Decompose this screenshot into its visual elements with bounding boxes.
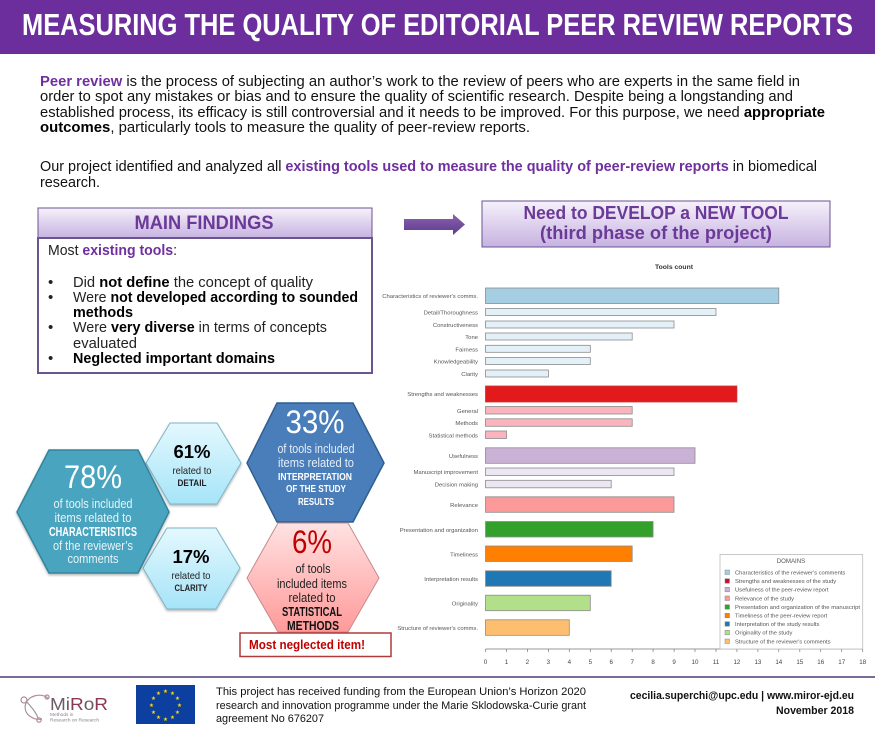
main findings list: Did not define the concept of quality — [73, 274, 313, 291]
category labels: Statistical methods — [429, 434, 478, 440]
category labels: Presentation and organization — [400, 528, 478, 534]
logo: EU flag: ★ — [149, 702, 154, 709]
bar chart: tools count — [382, 264, 867, 666]
x axis: 2 — [526, 659, 530, 666]
hexagon: 78% characteristics: of tools included — [54, 497, 133, 511]
main findings list: • — [48, 350, 53, 367]
category labels: Interpretation results — [424, 577, 478, 583]
x axis: 14 — [775, 659, 783, 666]
hexagon: 61% detail: related to — [172, 465, 212, 477]
main findings list — [38, 238, 372, 373]
contact details — [630, 690, 854, 717]
chart title: Tools count — [655, 264, 694, 271]
category labels: Relevance — [450, 503, 479, 509]
x axis: 5 — [589, 659, 593, 666]
category labels: Timeliness — [450, 552, 478, 558]
legend: domains: Structure of the reviewer's comments — [735, 639, 831, 645]
hexagon: 6% statistical methods: included items — [277, 577, 347, 591]
logo: EU flag: ★ — [175, 695, 180, 702]
main findings list: Were not developed according to sounded — [73, 289, 358, 306]
category labels: Knowledgeability — [434, 360, 478, 366]
logo: EU flag: ★ — [151, 695, 156, 702]
hexagon: 78% characteristics: CHARACTERISTICS — [49, 525, 137, 539]
hexagon: 78% characteristics: comments — [68, 552, 118, 566]
logo: EU flag: ★ — [163, 716, 168, 723]
hexagon: 17% clarity: 17% — [172, 547, 210, 567]
x axis: 8 — [651, 659, 655, 666]
arrow to new tool — [404, 214, 465, 235]
main findings list: methods — [73, 304, 133, 321]
hexagon: 78% characteristics: items related to — [54, 511, 132, 525]
callout: need to develop a new tool: (third phase of the project) — [540, 222, 772, 243]
logo: EU flag: ★ — [175, 709, 180, 716]
legend: domains: Originality of the study — [735, 631, 792, 637]
logo: EU flag: ★ — [163, 688, 168, 695]
hexagon: 78% characteristics: of the reviewer’s — [53, 539, 133, 553]
logo: EU flag: ★ — [151, 709, 156, 716]
main findings list: • — [48, 274, 53, 291]
legend: domains: Presentation and organization of the manuscript — [735, 605, 860, 611]
category labels: Decision making — [435, 482, 478, 488]
hexagon: 33% interpretation: items related to — [278, 456, 354, 470]
main findings list: Most existing tools: — [48, 242, 177, 259]
funding statement — [216, 686, 586, 725]
x axis: 10 — [692, 659, 699, 666]
category labels: Clarity — [461, 372, 478, 378]
category labels: Strengths and weaknesses — [407, 392, 478, 398]
x axis: 4 — [568, 659, 572, 666]
x axis: 15 — [796, 659, 804, 666]
x axis: 12 — [733, 659, 741, 666]
logo: EU flag: ★ — [170, 690, 175, 697]
main findings list: Neglected important domains — [73, 350, 275, 367]
main findings list: evaluated — [73, 335, 137, 352]
hexagon: 6% statistical methods: METHODS — [287, 619, 339, 633]
x axis: 0 — [484, 659, 488, 666]
legend: domains: Usefulness of the peer-review report — [735, 588, 829, 594]
legend: domains: Interpretation of the study results — [735, 622, 820, 628]
category labels: Originality — [452, 602, 478, 608]
intro text: peer review definition: Peer review is the process of subjecting an author’s work to the review of peers who are experts in the same field in — [40, 74, 800, 90]
category labels: Detail/Thoroughness — [424, 310, 478, 316]
intro text: peer review definition: order to spot any mistakes or bias and to ensure the quality of scientific research. Despite being a longstanding and — [40, 89, 793, 105]
contact details: cecilia.superchi@upc.edu | www.miror-ejd.eu — [630, 690, 854, 702]
hexagon: 33% interpretation: OF THE STUDY — [286, 483, 346, 495]
hexagon: 61% detail — [146, 423, 241, 504]
legend: domains: Characteristics of the reviewer's comments — [735, 570, 845, 576]
contact details: November 2018 — [776, 705, 854, 717]
x axis: 17 — [838, 659, 846, 666]
x axis: 16 — [817, 659, 825, 666]
category labels: Constructiveness — [433, 323, 478, 329]
x axis: 7 — [630, 659, 634, 666]
legend: domains: DOMAINS — [777, 558, 805, 565]
intro text: project aim: Our project identified and analyzed all existing tools used to measure the quality of peer-review reports in biomedical — [40, 159, 817, 175]
x axis: 13 — [754, 659, 762, 666]
hexagon: 17% clarity: related to — [172, 570, 211, 582]
hexagon: 6% statistical methods: STATISTICAL — [282, 605, 342, 619]
category labels: Manuscript improvement — [414, 470, 478, 476]
x axis: 6 — [609, 659, 613, 666]
logo: MiRoR: Methods in — [50, 712, 74, 718]
logo: EU flag: ★ — [170, 714, 175, 721]
x axis: 18 — [859, 659, 867, 666]
x axis: 11 — [713, 659, 720, 666]
category labels — [382, 294, 479, 632]
hexagon: 61% detail: DETAIL — [178, 478, 207, 489]
hexagon: 33% interpretation: 33% — [286, 404, 344, 440]
main findings list: • — [48, 289, 53, 306]
hexagon: 78% characteristics: 78% — [64, 459, 122, 495]
hexagon: 33% interpretation: INTERPRETATION — [278, 471, 352, 483]
funding statement: This project has received funding from the European Union’s Horizon 2020 — [216, 686, 586, 698]
hexagon: 6% statistical methods: of tools — [296, 562, 330, 576]
x axis — [484, 649, 867, 666]
hexagon: 33% interpretation: of tools included — [278, 442, 355, 456]
x axis: 9 — [672, 659, 676, 666]
logo: EU flag: ★ — [156, 690, 161, 697]
hexagon: 17% clarity — [143, 528, 240, 609]
panel: main findings — [38, 208, 372, 373]
bars — [486, 288, 779, 635]
logo: MiRoR — [21, 694, 108, 724]
logo: MiRoR: Research on Research — [50, 718, 99, 724]
hexagon: 78% characteristics — [17, 450, 169, 573]
callout: most neglected item: Most neglected item! — [249, 638, 365, 652]
callout: need to develop a new tool — [482, 201, 830, 247]
category labels: Characteristics of reviewer's comms. — [382, 294, 478, 300]
main findings list: Were very diverse in terms of concepts — [73, 319, 327, 336]
title banner — [0, 0, 875, 54]
logo: MiRoR: MiRoR — [50, 694, 108, 714]
footer divider — [0, 676, 875, 678]
category labels: Usefulness — [449, 454, 478, 460]
logo: EU flag — [136, 685, 195, 724]
hexagon: 6% statistical methods: 6% — [292, 524, 332, 560]
hexagon: 6% statistical methods: related to — [288, 591, 336, 605]
hexagon: 61% detail: 61% — [174, 442, 210, 462]
logo: EU flag: ★ — [156, 714, 161, 721]
category labels: Fairness — [455, 348, 478, 354]
intro text: project aim: research. — [40, 175, 100, 191]
category labels: Methods — [455, 421, 478, 427]
intro text: project aim — [40, 159, 817, 191]
hexagon: 17% clarity: CLARITY — [174, 583, 208, 594]
hexagon: 33% interpretation — [247, 403, 384, 522]
legend: domains: Timeliness of the peer-review report — [735, 614, 828, 620]
hexagon: 6% statistical methods — [247, 523, 379, 633]
funding statement: agreement No 676207 — [216, 713, 324, 725]
main findings list: • — [48, 319, 53, 336]
callout: most neglected item — [240, 633, 391, 656]
legend: domains: Relevance of the study — [735, 596, 794, 602]
intro text: peer review definition: outcomes, particularly tools to measure the quality of peer-review reports. — [40, 120, 530, 136]
x axis: 1 — [505, 659, 509, 666]
category labels: General — [457, 409, 478, 415]
category labels: Structure of reviewer's comms. — [397, 626, 478, 632]
legend: domains — [720, 554, 863, 649]
hexagon: 33% interpretation: RESULTS — [298, 496, 334, 508]
funding statement: research and innovation programme under the Marie Sklodowska-Curie grant — [216, 700, 586, 712]
main findings heading: MAIN FINDINGS — [134, 213, 274, 234]
callout: need to develop a new tool: Need to DEVELOP a NEW TOOL — [524, 202, 788, 223]
category labels: Tone — [465, 335, 479, 341]
x axis: 3 — [547, 659, 551, 666]
logo: EU flag: ★ — [177, 702, 182, 709]
main findings heading — [38, 208, 372, 238]
intro text: peer review definition — [40, 74, 825, 136]
legend: domains: Strengths and weaknesses of the study — [735, 579, 836, 585]
intro text: peer review definition: established process, its efficacy is still controversial and it needs to be improved. For this purpose, we need appropriate — [40, 105, 825, 121]
